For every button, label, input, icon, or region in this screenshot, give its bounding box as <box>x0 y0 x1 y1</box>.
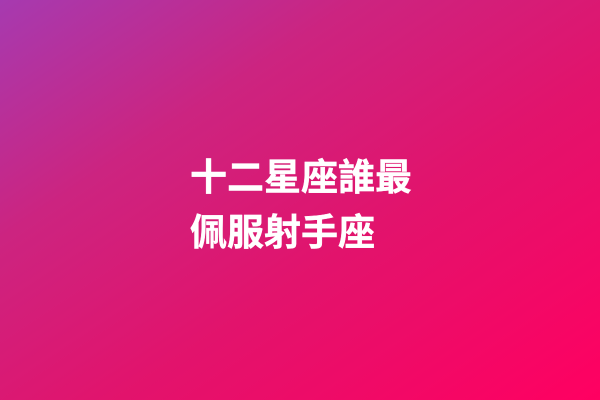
title: 十二星座誰最 <box>190 157 412 198</box>
title <box>190 157 412 253</box>
title: 佩服射手座 <box>190 212 375 253</box>
